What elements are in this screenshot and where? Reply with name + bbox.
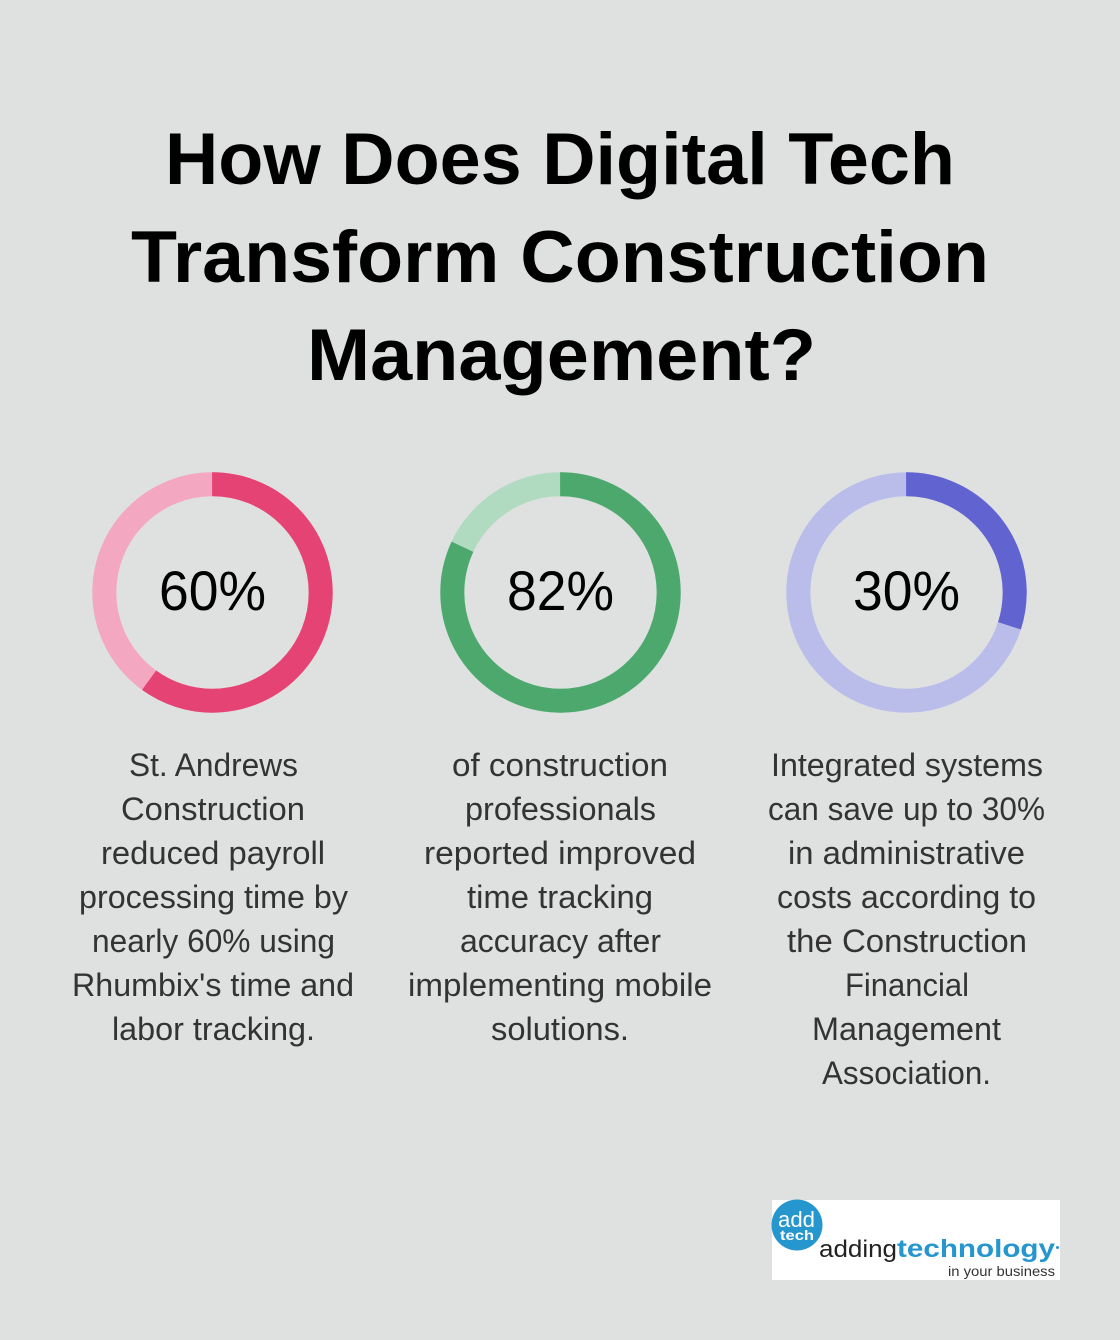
- text block: administrative cost description: the Construction: [787, 923, 1027, 959]
- donut chart: 30%: [798, 484, 1015, 701]
- text block: payroll description: processing time by: [79, 879, 348, 915]
- text block: payroll description: Rhumbix's time and: [72, 967, 354, 1003]
- text block: administrative cost description: Financial: [845, 967, 969, 1003]
- title: How Does Digital Tech: [165, 119, 955, 200]
- text block: time tracking description: accuracy after: [460, 923, 661, 959]
- title: Management?: [307, 315, 816, 396]
- panel: 60% payroll stat: [72, 484, 354, 1047]
- text block: administrative cost description: costs according to: [777, 879, 1036, 915]
- panel: 30% administrative cost stat: [768, 484, 1045, 1091]
- text block: payroll description: reduced payroll: [101, 835, 325, 871]
- title: [131, 119, 989, 396]
- panel: 82% time tracking stat: [408, 484, 712, 1047]
- text block: payroll description: nearly 60% using: [92, 923, 335, 959]
- text block: payroll description: Construction: [121, 791, 305, 827]
- text block: administrative cost description: Management: [812, 1011, 1001, 1047]
- text block: time tracking description: solutions.: [491, 1011, 629, 1047]
- text block: administrative cost description: Association.: [822, 1055, 991, 1091]
- stat value: 60%: 60%: [159, 559, 266, 622]
- text block: administrative cost description: Integrated systems: [771, 747, 1043, 783]
- logo wordmark: [819, 1235, 1059, 1279]
- logo wordmark: in your business: [948, 1263, 1055, 1279]
- text block: time tracking description: reported improved: [424, 835, 696, 871]
- text block: payroll description: labor tracking.: [112, 1011, 315, 1047]
- text block: administrative cost description: can save up to 30%: [768, 791, 1045, 827]
- logo wordmark: technology: [897, 1235, 1055, 1263]
- logo wordmark: adding: [819, 1236, 897, 1263]
- text block: time tracking description: implementing mobile: [408, 967, 712, 1003]
- title: Transform Construction: [131, 217, 989, 298]
- text block: payroll description: [72, 747, 354, 1047]
- text block: administrative cost description: [768, 747, 1045, 1091]
- icon: add tech badge: [772, 1200, 822, 1250]
- text block: administrative cost description: in administrative: [788, 835, 1025, 871]
- text block: payroll description: St. Andrews: [129, 747, 298, 783]
- text block: time tracking description: time tracking: [467, 879, 653, 915]
- text block: time tracking description: [408, 747, 712, 1047]
- stat value: 82%: 82%: [507, 559, 614, 622]
- stat value: 30%: 30%: [853, 559, 960, 622]
- donut chart: 82%: [452, 484, 669, 701]
- logo: adding technology: [772, 1200, 1060, 1280]
- text block: time tracking description: of construction: [452, 747, 668, 783]
- icon: add tech badge: add: [778, 1207, 815, 1232]
- text block: time tracking description: professionals: [465, 791, 656, 827]
- icon: add tech badge: tech: [780, 1227, 814, 1243]
- donut chart: 60%: [104, 484, 321, 701]
